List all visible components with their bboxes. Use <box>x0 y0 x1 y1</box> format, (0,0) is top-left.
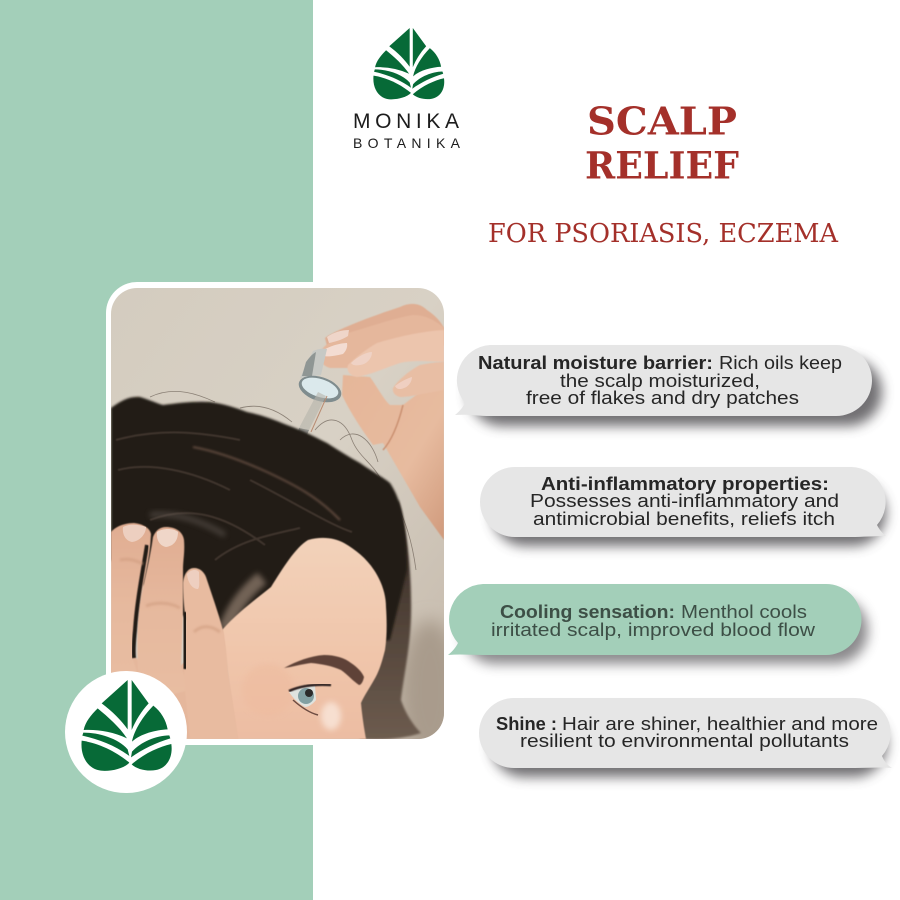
eye <box>289 685 331 715</box>
eyebrow <box>284 655 364 685</box>
callout: shine: Shine : <box>496 713 557 734</box>
callout: natural moisture barrier: Rich oils keep <box>719 352 842 373</box>
white photo frame <box>106 282 450 745</box>
forehead and face <box>222 538 387 739</box>
callout: shine <box>479 698 892 777</box>
callout: natural moisture barrier: Natural moisture barrier: <box>478 352 713 373</box>
callout: shine: resilient to environmental pollutants <box>520 730 849 751</box>
callout: natural moisture barrier <box>455 345 882 426</box>
callout: natural moisture barrier: the scalp moisturized, <box>560 370 760 391</box>
glass dropper <box>298 348 342 434</box>
circular leaf badge <box>65 671 187 793</box>
logo wordmark: BOTANIKA <box>353 135 461 151</box>
mint background panel <box>0 0 313 900</box>
callout: anti-inflammatory properties: Possesses anti-inflammatory and <box>530 490 839 511</box>
title: RELIEF <box>585 144 739 188</box>
title: SCALP <box>587 100 737 144</box>
icon: leaf <box>81 680 172 771</box>
callout: cooling sensation: Menthol cools <box>681 601 807 622</box>
icon: leaf logo <box>373 28 444 99</box>
callout: anti-inflammatory properties: antimicrobial benefits, reliefs itch <box>533 508 835 529</box>
loose hair wisps <box>150 391 416 570</box>
subtitle: FOR PSORIASIS, ECZEMA <box>488 218 839 249</box>
callout: cooling sensation <box>448 584 868 664</box>
logo wordmark <box>353 110 461 151</box>
callout: cooling sensation: Cooling sensation: <box>500 601 675 622</box>
brand logo <box>353 28 461 151</box>
callout: shine: Hair are shiner, healthier and more <box>562 713 878 734</box>
hair <box>111 397 421 739</box>
callout: natural moisture barrier: free of flakes and dry patches <box>526 387 799 408</box>
callout: cooling sensation: irritated scalp, improved blood flow <box>491 619 816 640</box>
left hand on hair <box>111 523 238 739</box>
title <box>585 100 739 188</box>
callout: anti-inflammatory properties <box>480 467 886 546</box>
photo: woman applying scalp oil <box>111 288 460 760</box>
right hand with dropper <box>320 304 444 540</box>
callout: anti-inflammatory properties: Anti-inflammatory properties: <box>541 473 829 494</box>
logo wordmark: MONIKA <box>353 110 459 133</box>
